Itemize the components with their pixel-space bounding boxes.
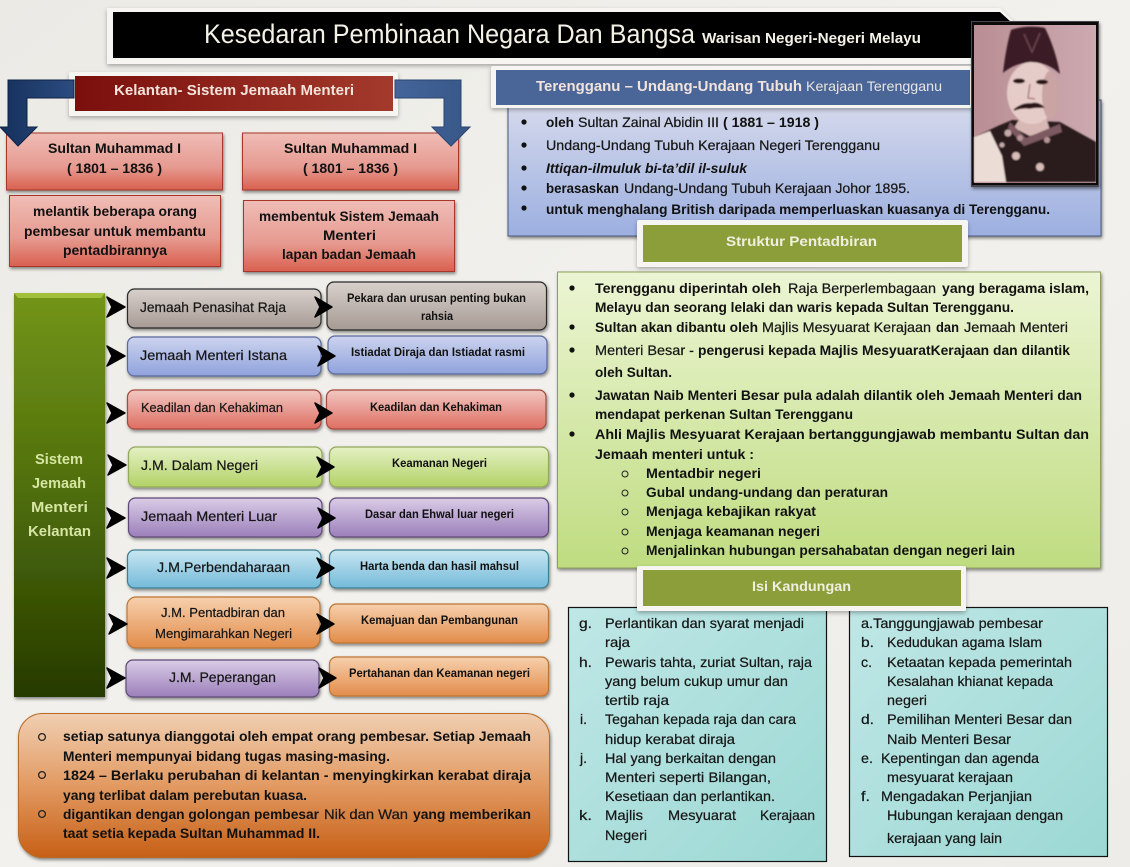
panel: Isi Kandungan left list: Negeri	[605, 827, 647, 843]
panel: Isi Kandungan right list: Pemilihan Menteri Besar dan	[887, 711, 1072, 727]
panel: Terengganu description: Undang-Undang Tubuh Kerajaan Negeri Terengganu	[546, 137, 880, 153]
panel: Isi Kandungan right list: negeri	[887, 692, 927, 708]
fez	[1003, 27, 1060, 74]
panel: Struktur Pentadbiran text: Melayu dan seorang lelaki dan waris kepada Sultan Terengganu.	[595, 299, 1014, 315]
panel: Isi Kandungan right list: Kepentingan dan agenda	[881, 750, 1039, 766]
box: membentuk Sistem Jemaah Menteri: Menteri	[323, 227, 376, 243]
row: J.M. Pentadbiran dan Mengimarahkan Negeri: Mengimarahkan Negeri	[155, 626, 292, 641]
panel: Struktur Pentadbiran text: Menjaga kebajikan rakyat	[646, 503, 816, 519]
panel: Isi Kandungan right list: e.	[861, 750, 873, 766]
panel: Isi Kandungan right list: Hubungan kerajaan dengan	[887, 807, 1063, 823]
panel: Isi Kandungan left list: Kesetiaan dan perlantikan.	[605, 788, 775, 804]
panel: Isi Kandungan left list: h.	[579, 654, 592, 670]
row: Jemaah Penasihat Raja: Pekara dan urusan penting bukan	[347, 291, 526, 305]
panel: Isi Kandungan left list: Mesyuarat	[668, 807, 736, 823]
row: J.M. Peperangan	[126, 657, 548, 697]
panel: Isi Kandungan left list: Hal yang berkaitan dengan	[605, 750, 776, 766]
row: Jemaah Penasihat Raja: Jemaah Penasihat Raja	[140, 299, 286, 315]
row: Keadilan dan Kehakiman: Keadilan dan Kehakiman	[370, 400, 502, 414]
box: Sultan Muhammad I left: ( 1801 – 1836 )	[67, 160, 162, 176]
title text: Kesedaran Pembinaan Negara Dan Bangsa	[204, 19, 696, 49]
panel: Sistem Jemaah Menteri Kelantan	[14, 293, 105, 697]
panel: Terengganu description: Sultan Zainal Abidin III	[578, 114, 719, 130]
panel: Struktur Pentadbiran text: Menjalinkan hubungan persahabatan dengan negeri lain	[646, 542, 1015, 558]
box: membentuk Sistem Jemaah Menteri: lapan badan Jemaah	[282, 246, 416, 262]
arrows: column from row boxes to detail boxes	[315, 297, 336, 688]
neck	[1014, 118, 1050, 136]
eyes, nose, moustache	[1013, 78, 1025, 84]
row: J.M. Dalam Negeri: Keamanan Negeri	[392, 456, 487, 470]
panel: Kelantan notes: Menteri mempunyai bidang tugas masing-masing.	[63, 748, 390, 764]
subtitle text: Warisan Negeri-Negeri Melayu	[702, 30, 921, 47]
box: Sultan Muhammad I right	[242, 133, 458, 190]
row: J.M.Perbendaharaan: J.M.Perbendaharaan	[157, 559, 290, 575]
panel: Kelantan notes: yang memberikan	[413, 806, 531, 822]
face	[1007, 62, 1057, 124]
panel: Isi Kandungan right list: c.	[861, 654, 872, 670]
row: Jemaah Menteri Luar: Jemaah Menteri Luar	[141, 508, 277, 524]
row: J.M. Peperangan: Pertahanan dan Keamanan negeri	[349, 666, 530, 680]
panel: Terengganu description: oleh	[546, 114, 574, 130]
panel: Struktur Pentadbiran text: dan	[936, 319, 959, 335]
panel: Isi Kandungan left list: yang belum cukup umur dan	[605, 673, 788, 689]
panel: Isi Kandungan right list: a.Tanggungjawab pembesar	[861, 615, 1043, 631]
heading: Kelantan banner: Kelantan- Sistem Jemaah Menteri	[114, 82, 354, 99]
row: Jemaah Menteri Istana: Istiadat Diraja dan Istiadat rasmi	[351, 345, 525, 359]
panel: Isi Kandungan left list: g.	[579, 615, 592, 631]
row: Jemaah Penasihat Raja: rahsia	[421, 309, 453, 323]
row: J.M.Perbendaharaan: Harta benda dan hasil mahsul	[360, 559, 519, 573]
panel: Sistem Jemaah Menteri Kelantan: Kelantan	[28, 523, 91, 540]
panel: Isi Kandungan right list: Mengadakan Perjanjian	[881, 788, 1032, 804]
uniform body	[974, 120, 1096, 182]
panel: Isi Kandungan left list: i.	[580, 711, 587, 727]
collar and medals	[1008, 122, 1062, 146]
panel: Isi Kandungan left list: Tegahan kepada raja dan cara	[605, 711, 796, 727]
panel: Kelantan notes: Nik dan Wan	[324, 806, 408, 822]
box: melantik pembesar: melantik beberapa orang	[33, 203, 197, 219]
heading: Isi Kandungan banner	[637, 566, 966, 611]
row: J.M. Pentadbiran dan Mengimarahkan Negeri: J.M. Pentadbiran dan	[161, 605, 285, 620]
panel: Kelantan notes: yang terlibat dalam perebutan kuasa.	[63, 787, 307, 803]
panel: Isi Kandungan right list: b.	[861, 634, 874, 650]
panel: Isi Kandungan right list: d.	[861, 711, 874, 727]
panel: Sistem Jemaah Menteri Kelantan: Menteri	[31, 499, 88, 516]
heading: Terengganu banner: Kerajaan Terengganu	[806, 78, 942, 94]
panel: Isi Kandungan right list	[850, 608, 1108, 856]
heading: Terengganu banner	[491, 66, 976, 108]
panel: Isi Kandungan right list: kerajaan yang lain	[887, 830, 1002, 846]
row: Jemaah Menteri Istana	[128, 336, 547, 376]
panel: Struktur Pentadbiran text: mendapat perkenan Sultan Terengganu	[595, 406, 853, 422]
heading: Terengganu banner: Terengganu – Undang-Undang Tubuh	[536, 78, 802, 95]
arrow: bent arrow left	[0, 80, 74, 146]
panel: Isi Kandungan right list: Naib Menteri Besar	[887, 731, 1011, 747]
panel: Isi Kandungan right list: Ketaatan kepada pemerintah	[887, 654, 1072, 670]
panel: Struktur Pentadbiran text: Menteri Besar -	[595, 342, 694, 358]
panel: Struktur Pentadbiran text: yang beragama islam,	[942, 280, 1089, 296]
panel: Isi Kandungan left list: j.	[579, 750, 587, 766]
row: J.M. Dalam Negeri	[128, 447, 548, 487]
panel: Kelantan notes: digantikan dengan golongan pembesar	[63, 806, 320, 822]
panel: Isi Kandungan left list: Perlantikan dan syarat menjadi	[605, 615, 804, 631]
panel: Isi Kandungan left list: hidup kerabat diraja	[605, 731, 735, 747]
panel: Kelantan notes: 1824 – Berlaku perubahan di kelantan - menyingkirkan kerabat diraja	[63, 767, 531, 783]
panel: Struktur Pentadbiran text: Ahli Majlis Mesyuarat Kerajaan bertanggungjawab membantu Sultan dan	[595, 426, 1089, 442]
panel: Isi Kandungan left list: Kerajaan	[760, 807, 815, 823]
panel: Isi Kandungan left list: Majlis	[605, 807, 643, 823]
heading: Struktur Pentadbiran banner	[637, 220, 968, 267]
panel: Isi Kandungan left list: tertib raja	[605, 692, 669, 708]
panel: Isi Kandungan left list	[568, 608, 826, 862]
panel: Struktur Pentadbiran text: Gubal undang-undang dan peraturan	[646, 484, 888, 500]
panel: Isi Kandungan left list: Pewaris tahta, zuriat Sultan, raja	[605, 654, 812, 670]
panel: Kelantan notes	[18, 714, 550, 858]
panel: Struktur Pentadbiran text: Mentadbir negeri	[646, 465, 761, 481]
panel: Kelantan notes: taat setia kepada Sultan Muhammad II.	[63, 825, 320, 841]
panel: Isi Kandungan left list: raja	[605, 634, 630, 650]
row: Jemaah Menteri Istana: Jemaah Menteri Istana	[140, 347, 287, 363]
panel: Struktur Pentadbiran text: Jemaah Menteri	[964, 319, 1068, 335]
row: J.M. Dalam Negeri: J.M. Dalam Negeri	[141, 457, 258, 473]
heading: Isi Kandungan banner: Isi Kandungan	[752, 578, 851, 594]
panel: Struktur Pentadbiran text: Jemaah menteri untuk :	[595, 446, 754, 462]
box: Sultan Muhammad I right: Sultan Muhammad I	[284, 140, 417, 156]
panel: Sistem Jemaah Menteri Kelantan: Jemaah	[32, 475, 86, 492]
panel: Struktur Pentadbiran text: Sultan akan dibantu oleh	[595, 319, 758, 335]
panel: Struktur Pentadbiran text: oleh Sultan.	[595, 364, 672, 380]
panel: Sistem Jemaah Menteri Kelantan: Sistem	[35, 451, 83, 468]
row: J.M. Peperangan: J.M. Peperangan	[169, 669, 276, 685]
panel: Isi Kandungan left list: Menteri seperti Bilangan,	[605, 769, 771, 785]
panel: Terengganu description: ( 1881 – 1918 )	[723, 114, 819, 130]
panel: Isi Kandungan left list: k.	[579, 807, 592, 823]
box: melantik pembesar	[10, 196, 220, 266]
portrait photo of Sultan Zainal Abidin III	[971, 21, 1099, 187]
panel: Isi Kandungan right list: mesyuarat kerajaan	[887, 769, 1013, 785]
panel: Struktur Pentadbiran text: Raja Berperlembagaan	[788, 280, 936, 296]
box: Sultan Muhammad I left	[6, 133, 222, 190]
row: J.M. Pentadbiran dan Mengimarahkan Negeri	[127, 597, 548, 648]
row: Jemaah Menteri Luar	[128, 498, 548, 537]
panel: Isi Kandungan right list: Kesalahan khianat kepada	[887, 673, 1053, 689]
panel: Struktur Pentadbiran text	[558, 272, 1100, 568]
row: J.M.Perbendaharaan	[128, 550, 548, 588]
panel: Terengganu description: untuk menghalang British daripada memperluaskan kuasanya di Terengganu.	[546, 201, 1050, 217]
box: melantik pembesar: pentadbirannya	[63, 242, 167, 258]
panel: Terengganu description: Undang-Undang Tubuh Kerajaan Johor 1895.	[624, 180, 910, 196]
arrows: column from Sistem panel to row boxes	[107, 297, 127, 688]
panel: Struktur Pentadbiran text: Jawatan Naib Menteri Besar pula adalah dilantik oleh Jemaah Menteri dan	[595, 387, 1082, 403]
panel: Struktur Pentadbiran text: pengerusi kepada Majlis MesyuaratKerajaan dan dilantik	[698, 342, 1070, 358]
box: membentuk Sistem Jemaah Menteri	[244, 200, 454, 272]
panel: Terengganu description: Ittiqan-ilmuluk bi-ta’dil il-suluk	[546, 160, 748, 176]
heading: Struktur Pentadbiran banner: Struktur Pentadbiran	[726, 233, 877, 249]
row: Jemaah Penasihat Raja	[128, 282, 546, 330]
box: membentuk Sistem Jemaah Menteri: membentuk Sistem Jemaah	[259, 208, 439, 224]
box: melantik pembesar: pembesar untuk membantu	[24, 223, 206, 239]
light sash	[974, 131, 1006, 182]
panel: Struktur Pentadbiran text: Menjaga keamanan negeri	[646, 523, 820, 539]
row: Keadilan dan Kehakiman: Keadilan dan Kehakiman	[141, 400, 283, 415]
panel: Terengganu description: berasaskan	[546, 180, 619, 196]
row: Jemaah Menteri Luar: Dasar dan Ehwal luar negeri	[365, 507, 514, 521]
arrow: bent arrow right	[395, 80, 470, 146]
panel: Isi Kandungan right list: Kedudukan agama Islam	[887, 634, 1042, 650]
box: Sultan Muhammad I right: ( 1801 – 1836 )	[303, 160, 398, 176]
box: Sultan Muhammad I left: Sultan Muhammad I	[48, 140, 181, 156]
row: Keadilan dan Kehakiman	[128, 390, 546, 429]
heading: Struktur Pentadbiran and green panel	[558, 220, 1100, 568]
panel: Struktur Pentadbiran text: Terengganu diperintah oleh	[595, 280, 781, 296]
panel: Struktur Pentadbiran text: Majlis Mesyuarat Kerajaan	[762, 319, 931, 335]
row: J.M. Pentadbiran dan Mengimarahkan Negeri: Kemajuan dan Pembangunan	[361, 613, 518, 627]
panel: Kelantan notes: setiap satunya dianggotai oleh empat orang pembesar. Setiap Jemaah	[63, 728, 531, 744]
heading: Kelantan banner	[69, 72, 398, 116]
title banner	[107, 8, 1098, 64]
panel: Terengganu description	[508, 100, 1101, 236]
panel: Isi Kandungan right list: f.	[861, 788, 870, 804]
